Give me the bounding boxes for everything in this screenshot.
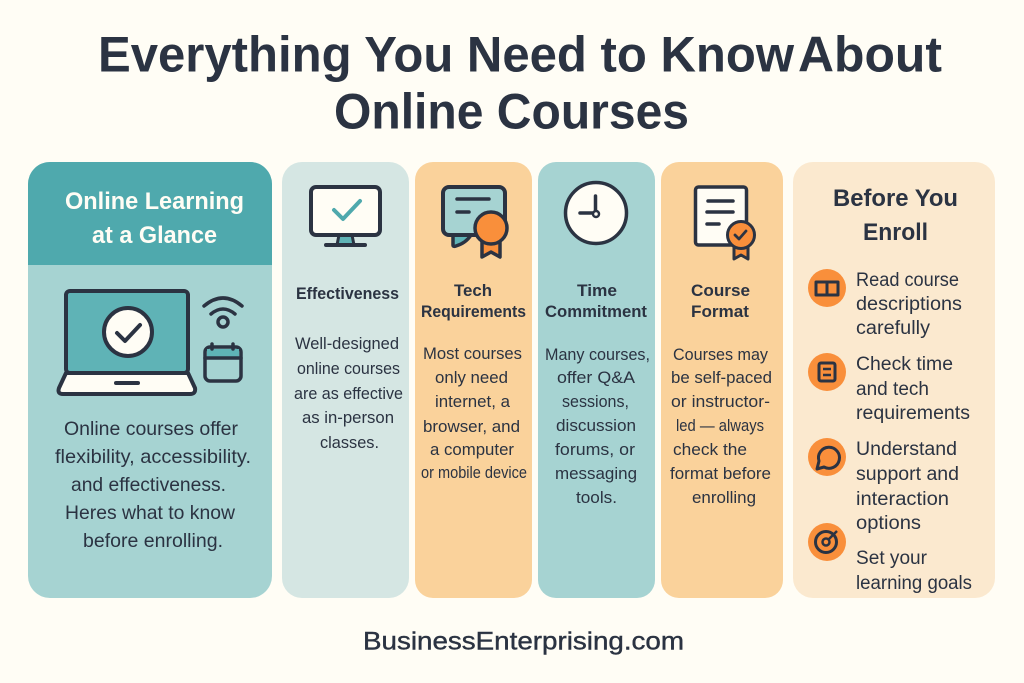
- item: read course descriptions: Read course: [856, 270, 959, 291]
- text: time commitment body: Many courses,: [545, 345, 650, 364]
- heading: course format: Format: [691, 302, 749, 321]
- item: read course descriptions: [856, 270, 962, 339]
- text: tech requirements body: browser, and: [423, 417, 520, 436]
- text: course format body: led — always: [676, 416, 764, 435]
- panel: effectiveness: [282, 162, 409, 598]
- item: set learning goals: learning goals: [856, 573, 972, 594]
- panel: before you enroll: [793, 162, 995, 598]
- panel heading: online learning: [65, 188, 244, 249]
- icon: wifi: [204, 298, 242, 327]
- text: course format body: enrolling: [692, 488, 756, 507]
- heading: tech requirements: [421, 281, 526, 321]
- item: check time and tech: Check time: [856, 354, 953, 375]
- text: effectiveness body: classes.: [320, 433, 379, 452]
- heading: time commitment: Commitment: [545, 302, 647, 321]
- item: read course descriptions: carefully: [856, 318, 931, 339]
- text: effectiveness body: Well-designed: [295, 334, 399, 353]
- icon: clock: [566, 182, 626, 244]
- item: understand support: interaction: [856, 489, 949, 510]
- panel body text: Online courses offer: [64, 418, 238, 440]
- text: course format body: format before: [670, 464, 771, 483]
- icon: laptop with check: [58, 291, 195, 394]
- heading: before you enroll: Before You: [833, 185, 958, 212]
- item: check time and tech: [856, 354, 970, 424]
- icon: document with badge: [696, 187, 754, 259]
- text: course format body: Courses may: [673, 345, 768, 364]
- text: course format body: check the: [673, 440, 747, 459]
- text: time commitment body: forums, or: [555, 440, 635, 459]
- panel body text: before enrolling.: [83, 530, 223, 552]
- title: About: [798, 26, 942, 82]
- text: course format body: [670, 345, 772, 507]
- text: tech requirements body: Most courses: [423, 344, 522, 363]
- item: understand support: options: [856, 513, 921, 534]
- item: understand support: [856, 439, 959, 534]
- heading: before you enroll: [833, 185, 958, 246]
- text: time commitment body: discussion: [556, 416, 636, 435]
- text: effectiveness body: online courses: [297, 359, 400, 378]
- heading: course format: [691, 281, 750, 321]
- item: check time and tech: requirements: [856, 403, 970, 424]
- panel heading: online learning: at a Glance: [92, 222, 217, 249]
- panel body text: and effectiveness.: [71, 474, 226, 496]
- panel body text: [55, 418, 251, 552]
- panel: tech requirements: [415, 162, 532, 598]
- text: time commitment body: [545, 345, 650, 507]
- item: set learning goals: [856, 548, 972, 594]
- panel: course format: [661, 162, 783, 598]
- heading: effectiveness: Effectiveness: [296, 284, 399, 303]
- item: read course descriptions: descriptions: [856, 294, 962, 315]
- text: time commitment body: sessions,: [562, 392, 629, 411]
- footer: website: BusinessEnterprising.com: [363, 628, 684, 656]
- text: time commitment body: tools.: [576, 488, 617, 507]
- text: tech requirements body: only need: [435, 368, 508, 387]
- icon: certificate chat: [443, 187, 507, 257]
- title: [98, 26, 942, 140]
- item: understand support: Understand: [856, 439, 957, 460]
- panel body text: Heres what to know: [65, 502, 236, 524]
- text: time commitment body: messaging: [555, 464, 637, 483]
- heading: time commitment: [545, 281, 647, 321]
- panel body text: flexibility, accessibility.: [55, 446, 251, 468]
- text: course format body: or instructor-: [671, 392, 770, 411]
- text: tech requirements body: internet, a: [435, 392, 511, 411]
- item: understand support: support and: [856, 464, 959, 485]
- icon: speech bubble: [808, 438, 846, 476]
- text: course format body: be self-paced: [671, 368, 772, 387]
- title: Everything You Need to Know: [98, 26, 794, 82]
- text: tech requirements body: or mobile device: [421, 463, 527, 482]
- icon: monitor with check: [311, 187, 380, 245]
- text: effectiveness body: as in-person: [302, 408, 394, 427]
- item: check time and tech: and tech: [856, 379, 929, 400]
- icon: book: [808, 269, 846, 307]
- panel: online learning at a glance: [28, 162, 272, 598]
- heading: tech requirements: Requirements: [421, 302, 526, 321]
- text: tech requirements body: [421, 344, 527, 482]
- heading: time commitment: Time: [577, 281, 617, 300]
- heading: before you enroll: Enroll: [863, 219, 928, 246]
- item: set learning goals: Set your: [856, 548, 928, 569]
- text: effectiveness body: are as effective: [294, 384, 403, 403]
- title: Online Courses: [334, 84, 689, 140]
- heading: tech requirements: Tech: [454, 281, 492, 300]
- icon: target: [808, 523, 846, 561]
- text: tech requirements body: a computer: [430, 440, 514, 459]
- icon: calendar: [205, 344, 241, 381]
- text: time commitment body: offer Q&A: [557, 368, 636, 387]
- icon: checklist: [808, 353, 846, 391]
- heading: course format: Course: [691, 281, 750, 300]
- panel: time commitment: [538, 162, 655, 598]
- text: effectiveness body: [294, 334, 403, 452]
- panel heading: online learning: Online Learning: [65, 188, 244, 215]
